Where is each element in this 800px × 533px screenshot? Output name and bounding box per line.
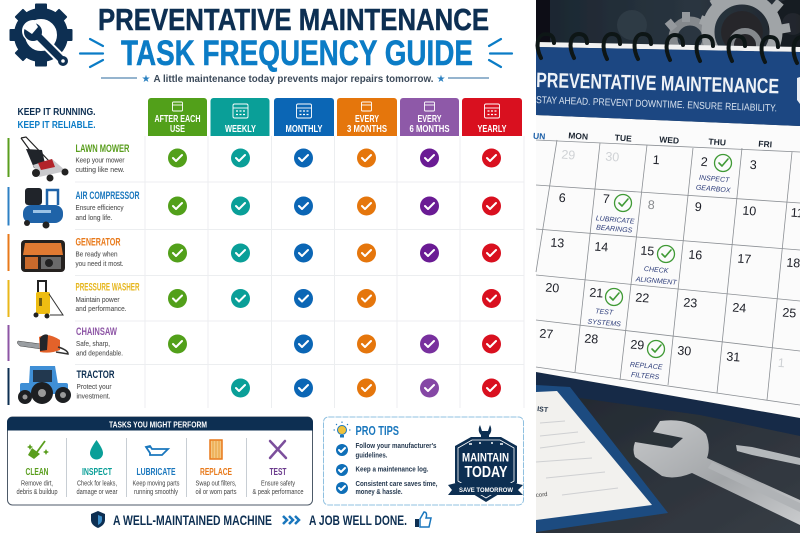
column header: monthly bbox=[274, 98, 334, 136]
row: generator: you need it most. bbox=[76, 259, 124, 268]
slogan: keep it running bbox=[18, 107, 96, 131]
footer slogan bbox=[91, 511, 431, 528]
title: PREVENTATIVE MAINTENANCE bbox=[98, 2, 489, 37]
calendar dates: 3 bbox=[749, 158, 757, 172]
icon: gear and wrench logo bbox=[10, 4, 72, 66]
task: clean bbox=[16, 441, 58, 496]
weekday labels: UN bbox=[533, 131, 546, 141]
row: air compressor: and long life. bbox=[76, 213, 112, 222]
photo: desk surface bbox=[536, 376, 800, 533]
column header: every 3 months: EVERY bbox=[355, 113, 379, 125]
calendar dates: 21 bbox=[589, 286, 604, 300]
tasks heading: TASKS YOU MIGHT PERFORM bbox=[109, 420, 207, 430]
task: lubricate: Keep moving parts bbox=[132, 481, 180, 488]
calendar dates: 1 bbox=[777, 356, 785, 370]
weekday labels: TUE bbox=[614, 132, 632, 144]
panel: infographic background bbox=[0, 0, 535, 533]
row: tractor: investment. bbox=[76, 392, 110, 401]
row: air compressor: AIR COMPRESSOR bbox=[76, 190, 140, 202]
column header: after each use bbox=[148, 98, 207, 136]
icon: air compressor bbox=[23, 188, 63, 228]
tasks heading bbox=[7, 417, 313, 430]
calendar task: test systems: SYSTEMS bbox=[587, 319, 621, 328]
column header: every 6 months: EVERY bbox=[418, 113, 442, 125]
calendar dates: 31 bbox=[726, 350, 741, 364]
row: chainsaw bbox=[8, 325, 123, 361]
badge: maintain today save tomorrow bbox=[448, 425, 523, 502]
calendar task: lubricate bearings bbox=[596, 194, 635, 235]
row: lawn mower: cutting like new. bbox=[76, 165, 124, 174]
calendar task: inspect gearbox: GEARBOX bbox=[696, 185, 731, 195]
calendar dates: 9 bbox=[694, 200, 702, 214]
clipboard bbox=[536, 385, 668, 532]
tip: maintenance log: Keep a maintenance log. bbox=[356, 467, 429, 474]
calendar dates: 1 bbox=[652, 153, 660, 167]
task: replace: Swap out filters, bbox=[196, 481, 237, 488]
tip: consistent care: Consistent care saves time, bbox=[356, 481, 438, 488]
icon: chevrons bbox=[283, 516, 299, 524]
tip: consistent care bbox=[336, 481, 438, 496]
tip: manufacturer's guidelines: Follow your manufacturer's bbox=[356, 443, 437, 450]
slogan: keep it running: KEEP IT RELIABLE. bbox=[18, 120, 96, 131]
icon: lawn mower bbox=[21, 137, 68, 182]
icon: pressure washer bbox=[34, 281, 63, 318]
calendar task: replace filters: FILTERS bbox=[631, 372, 660, 381]
column header: after each use: AFTER EACH bbox=[154, 113, 200, 125]
calendar dates: 30 bbox=[605, 150, 620, 164]
row: generator: GENERATOR bbox=[76, 237, 121, 249]
task: replace bbox=[196, 440, 237, 496]
calendar task: replace filters: REPLACE bbox=[630, 362, 663, 371]
calendar banner bbox=[536, 47, 800, 126]
title bbox=[98, 2, 489, 73]
clipboard: IST bbox=[537, 406, 549, 414]
icon: background gears bbox=[665, 0, 800, 66]
calendar dates bbox=[539, 148, 800, 370]
task: inspect: damage or wear bbox=[76, 489, 118, 496]
task: clean: Remove dirt, bbox=[21, 481, 53, 488]
row: pressure washer: Maintain power bbox=[76, 295, 120, 304]
wrench and pen bbox=[634, 420, 800, 525]
calendar dates: 29 bbox=[630, 338, 645, 352]
row: pressure washer: and performance. bbox=[76, 304, 126, 313]
column header: weekly: WEEKLY bbox=[225, 123, 256, 135]
column header: every 3 months: 3 MONTHS bbox=[347, 123, 387, 135]
clipboard: cord bbox=[536, 492, 548, 499]
frequency check grid bbox=[168, 148, 501, 398]
task: test bbox=[252, 441, 304, 496]
row: tractor bbox=[8, 366, 115, 405]
calendar dates: 17 bbox=[737, 252, 752, 266]
task: clean: CLEAN bbox=[26, 467, 48, 478]
icon: generator bbox=[21, 240, 65, 272]
tagline: A little maintenance today prevents major repairs tomorrow. bbox=[154, 73, 434, 85]
tip: manufacturer's guidelines bbox=[336, 443, 437, 460]
panel: pro tips bbox=[324, 417, 524, 505]
column header: every 3 months bbox=[337, 98, 397, 136]
weekday labels: WED bbox=[659, 134, 679, 146]
photo: maintenance calendar bbox=[533, 0, 800, 533]
calendar dates: 16 bbox=[688, 248, 703, 262]
calendar dates: 29 bbox=[561, 148, 576, 162]
row: lawn mower: LAWN MOWER bbox=[76, 143, 130, 155]
calendar dates: 25 bbox=[782, 306, 797, 320]
row: lawn mower: Keep your mower bbox=[76, 156, 125, 165]
task: clean: debris & buildup bbox=[16, 489, 58, 496]
calendar dates: 23 bbox=[683, 296, 698, 310]
row: lawn mower bbox=[8, 137, 130, 182]
task: test: & peak performance bbox=[252, 489, 304, 496]
calendar page bbox=[536, 115, 800, 418]
task: inspect: Check for leaks, bbox=[77, 481, 117, 488]
calendar dates: 24 bbox=[732, 301, 747, 315]
tagline: ★ bbox=[437, 74, 446, 85]
photo background: dark workshop bbox=[536, 0, 800, 533]
tagline: ★ bbox=[142, 74, 151, 85]
calendar spiral rings bbox=[538, 34, 800, 63]
row: air compressor: Ensure efficiency bbox=[76, 203, 124, 212]
icon: right burst lines bbox=[489, 39, 512, 67]
icon: left burst lines bbox=[80, 39, 103, 67]
calendar task: check alignment: ALIGNMENT bbox=[634, 276, 677, 287]
footer slogan: A WELL-MAINTAINED MACHINE bbox=[113, 513, 272, 528]
calendar task: lubricate bearings: BEARINGS bbox=[596, 224, 633, 235]
calendar dates: 6 bbox=[558, 191, 566, 205]
footer slogan: A JOB WELL DONE. bbox=[309, 513, 407, 528]
badge: maintain today save tomorrow: SAVE TOMORROW bbox=[459, 487, 514, 494]
calendar dates: 8 bbox=[647, 198, 655, 212]
tip: manufacturer's guidelines: guidelines. bbox=[356, 453, 388, 460]
slogan: keep it running: KEEP IT RUNNING. bbox=[18, 107, 96, 118]
calendar grid bbox=[536, 140, 800, 405]
calendar task: inspect gearbox: INSPECT bbox=[699, 175, 730, 184]
task: inspect bbox=[76, 440, 118, 496]
calendar task: inspect gearbox bbox=[696, 154, 732, 195]
row: air compressor bbox=[8, 187, 140, 228]
row: chainsaw: and dependable. bbox=[76, 348, 123, 357]
column header: monthly: MONTHLY bbox=[286, 123, 322, 135]
task: inspect: INSPECT bbox=[82, 467, 112, 478]
calendar dates: 30 bbox=[677, 344, 692, 358]
weekday labels: THU bbox=[708, 136, 726, 148]
row: chainsaw: Safe, sharp, bbox=[76, 339, 110, 348]
row: chainsaw: CHAINSAW bbox=[76, 326, 117, 338]
calendar dates: 20 bbox=[545, 281, 560, 295]
task: test: TEST bbox=[270, 467, 286, 478]
calendar dates: 27 bbox=[539, 327, 554, 341]
calendar dates: 13 bbox=[550, 236, 565, 250]
column header: yearly bbox=[462, 98, 522, 136]
calendar task: check alignment bbox=[634, 246, 677, 287]
icon: chainsaw bbox=[17, 334, 68, 354]
task: lubricate: running smoothly bbox=[134, 489, 178, 496]
calendar dates: 10 bbox=[742, 204, 757, 218]
calendar task: check alignment: CHECK bbox=[644, 266, 669, 275]
badge: maintain today save tomorrow: TODAY bbox=[464, 464, 508, 481]
task: lubricate: LUBRICATE bbox=[136, 467, 176, 478]
task: lubricate bbox=[132, 446, 180, 496]
task: test: Ensure safety bbox=[261, 481, 295, 488]
calendar dates: 2 bbox=[700, 155, 708, 169]
title: TASK FREQUENCY GUIDE bbox=[121, 33, 473, 73]
calendar task: test systems bbox=[587, 288, 622, 328]
calendar task: lubricate bearings: LUBRICATE bbox=[596, 215, 635, 226]
icon: tractor bbox=[18, 366, 71, 404]
row: generator bbox=[8, 234, 124, 272]
column header: weekly bbox=[210, 98, 270, 136]
calendar dates: 28 bbox=[584, 332, 599, 346]
row: pressure washer bbox=[8, 280, 140, 318]
tip: consistent care: money & hassle. bbox=[356, 489, 403, 496]
row: tractor: Protect your bbox=[76, 382, 112, 391]
panel: tasks you might perform bbox=[7, 417, 313, 505]
weekday labels: FRI bbox=[758, 139, 772, 149]
weekday labels: MON bbox=[568, 130, 588, 142]
task: replace: oil or worn parts bbox=[196, 489, 237, 496]
icon: shield bbox=[91, 511, 105, 528]
column header: every 6 months: 6 MONTHS bbox=[410, 123, 450, 135]
calendar dates: 22 bbox=[635, 291, 650, 305]
calendar task: test systems: TEST bbox=[595, 308, 614, 317]
calendar dates: 7 bbox=[602, 192, 610, 206]
icon: light bulb bbox=[334, 422, 350, 438]
weekday labels bbox=[533, 130, 772, 149]
column header: every 6 months bbox=[400, 98, 459, 136]
task: replace: REPLACE bbox=[200, 467, 232, 478]
tip: maintenance log bbox=[336, 464, 429, 476]
column header: after each use: USE bbox=[170, 123, 185, 135]
calendar dates: 14 bbox=[594, 240, 609, 254]
calendar dates: 15 bbox=[640, 244, 655, 258]
column header: yearly: YEARLY bbox=[478, 123, 506, 135]
panel: pro tips: PRO TIPS bbox=[356, 424, 399, 438]
row: tractor: TRACTOR bbox=[76, 369, 115, 381]
icon: thumbs up bbox=[415, 512, 431, 527]
badge: maintain today save tomorrow: MAINTAIN bbox=[462, 453, 509, 465]
row: pressure washer: PRESSURE WASHER bbox=[76, 282, 140, 294]
row: generator: Be ready when bbox=[76, 250, 118, 259]
calendar task: replace filters bbox=[630, 340, 664, 381]
